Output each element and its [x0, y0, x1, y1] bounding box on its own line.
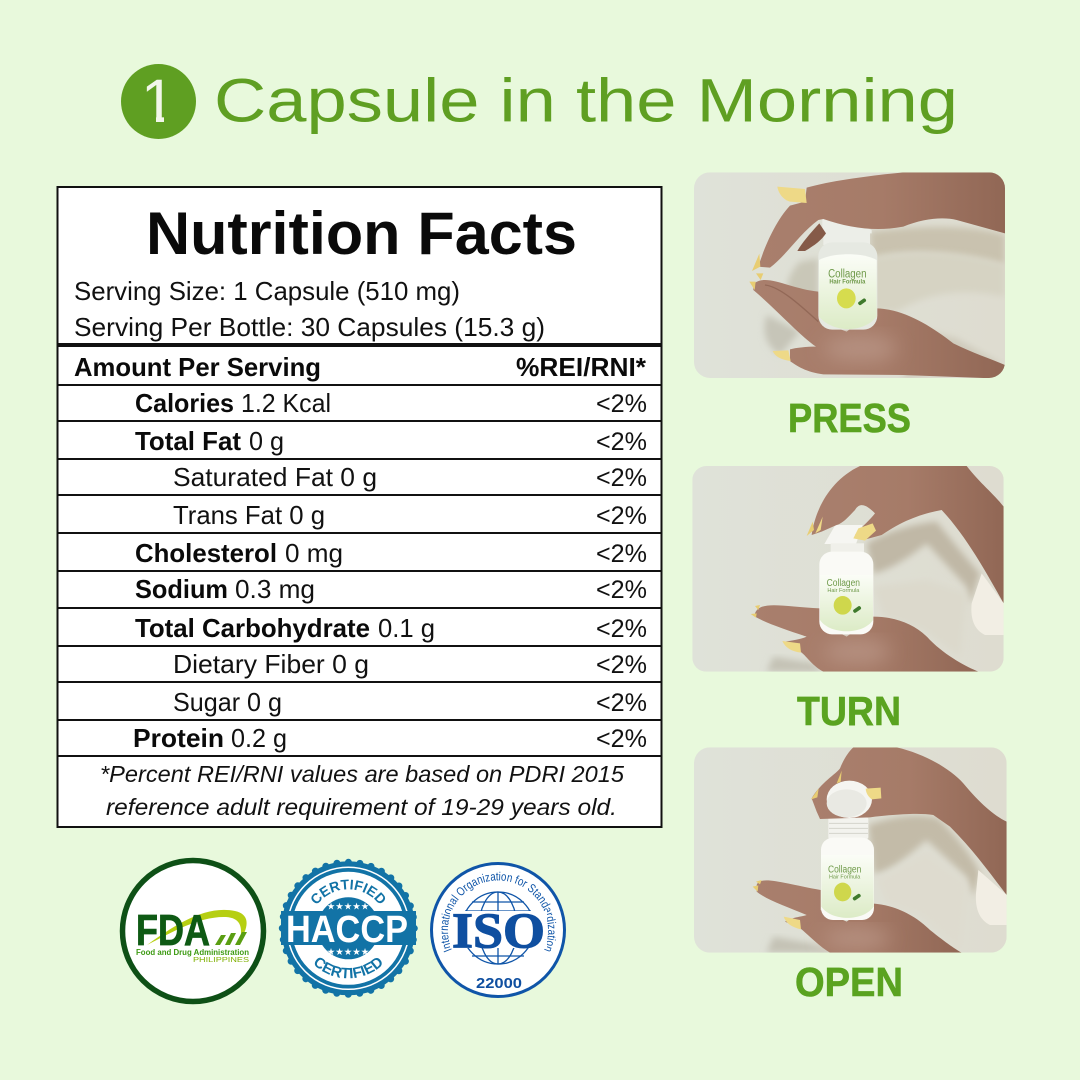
serving information: Serving Size: 1 Capsule (510 mg) — [74, 276, 460, 306]
badge: FDA Philippines — [122, 860, 264, 1002]
sleeve — [976, 870, 1007, 925]
row: sodium: 0.3 mg — [235, 574, 315, 604]
title — [121, 64, 958, 139]
badge: HACCP certified: HACCP — [286, 909, 408, 951]
table header row: Amount Per Serving — [74, 352, 321, 382]
bottle: Collagen — [828, 865, 861, 876]
badge: FDA Philippines: FDA — [136, 906, 210, 955]
upper nails — [853, 523, 876, 541]
row: dietary fiber: <2% — [596, 651, 647, 679]
row: protein: <2% — [596, 725, 647, 753]
serving information — [74, 276, 545, 342]
bottle: Hair Formula — [827, 588, 860, 594]
badge: HACCP certified: CERTIFIED — [311, 880, 386, 904]
lower hand — [755, 605, 978, 672]
row: calories — [135, 388, 647, 418]
upper hand — [797, 223, 826, 251]
row: dietary fiber: Dietary Fiber 0 g — [173, 649, 369, 679]
upper nails — [777, 187, 807, 203]
photo: turn — [692, 466, 1004, 672]
badge: HACCP certified: ★★★★★ — [327, 947, 369, 958]
upper hand — [812, 466, 1004, 603]
number badge — [121, 64, 196, 139]
row: sodium: Sodium — [135, 574, 228, 604]
row: calories: <2% — [596, 390, 647, 418]
row: trans fat: <2% — [596, 502, 647, 530]
row: total carbohydrate: Total Carbohydrate — [135, 613, 370, 643]
row: total carbohydrate: <2% — [596, 615, 647, 643]
row: saturated fat: Saturated Fat 0 g — [173, 462, 377, 492]
lower nails — [784, 917, 801, 929]
label: press: PRESS — [788, 395, 911, 441]
label: open: OPEN — [795, 959, 903, 1005]
upper hand — [812, 747, 1007, 895]
row: cholesterol: <2% — [596, 540, 647, 568]
footnote — [100, 761, 624, 820]
lower hand — [753, 280, 1005, 378]
row: total fat: Total Fat — [135, 426, 241, 456]
bottle: Hair Formula — [829, 278, 866, 285]
row: protein — [133, 723, 647, 753]
sleeve — [971, 573, 1004, 635]
row: protein: Protein — [133, 723, 224, 753]
bottle — [818, 219, 877, 330]
label: turn: TURN — [797, 688, 901, 734]
row: total fat: 0 g — [249, 426, 284, 456]
row: trans fat — [173, 500, 647, 530]
row: protein: 0.2 g — [231, 723, 287, 753]
row: sugar: Sugar 0 g — [173, 687, 282, 717]
bottle: Hair Formula — [829, 875, 861, 881]
row: cholesterol: 0 mg — [285, 538, 343, 568]
footnote: reference adult requirement of 19-29 years old. — [106, 794, 617, 820]
serving information: Serving Per Bottle: 30 Capsules (15.3 g) — [74, 312, 545, 342]
row: calories: Calories — [135, 388, 234, 418]
badge: ISO 22000: 22000 — [476, 975, 522, 992]
photo: press — [694, 172, 1005, 378]
table heading: Nutrition Facts — [146, 200, 577, 267]
row: total fat: <2% — [596, 428, 647, 456]
row: cholesterol — [135, 538, 647, 568]
badge: ISO 22000: ISO — [452, 902, 545, 958]
upper nails — [866, 788, 881, 799]
row: dietary fiber — [173, 649, 647, 679]
badge: HACCP certified: ★★★★★ — [327, 902, 369, 912]
panel: nutrition facts table — [57, 187, 662, 827]
row: trans fat: Trans Fat 0 g — [173, 500, 325, 530]
bottle — [821, 817, 874, 920]
badge: ISO 22000 — [430, 862, 566, 998]
lower nails — [782, 641, 801, 653]
row: total carbohydrate: 0.1 g — [378, 613, 435, 643]
row: saturated fat — [173, 462, 647, 492]
row: sodium — [135, 574, 647, 604]
bottle — [819, 525, 873, 634]
photo: open — [694, 747, 1007, 953]
row: sodium: <2% — [596, 576, 647, 604]
row: sugar: <2% — [596, 689, 647, 717]
badge: HACCP certified: CERTIFIED — [314, 958, 382, 978]
bottle: Collagen — [828, 266, 866, 280]
bottle: Collagen — [827, 578, 860, 589]
badge: FDA Philippines: PHILIPPINES — [193, 957, 249, 964]
badge: ISO 22000: International Organization for Standardization — [442, 872, 556, 952]
number badge: 1 — [141, 67, 175, 135]
lower hand — [757, 880, 962, 953]
lower nails — [773, 350, 791, 361]
row: total fat — [135, 426, 647, 456]
table header row: %REI/RNI* — [516, 352, 647, 382]
table header row — [74, 352, 647, 382]
row: total carbohydrate — [135, 613, 647, 643]
row: cholesterol: Cholesterol — [135, 538, 277, 568]
footnote: *Percent REI/RNI values are based on PDRI 2015 — [100, 761, 624, 787]
row: saturated fat: <2% — [596, 464, 647, 492]
row: calories: 1.2 Kcal — [241, 388, 331, 418]
FDA swoosh — [147, 910, 247, 945]
row: sugar — [173, 687, 647, 717]
globe — [462, 892, 534, 964]
badge: HACCP certified — [278, 858, 418, 998]
title text: Capsule in the Morning — [214, 66, 958, 134]
HACCP banner — [281, 911, 416, 945]
badge: FDA Philippines: Food and Drug Administration — [136, 948, 249, 957]
bottle cap — [827, 781, 872, 818]
